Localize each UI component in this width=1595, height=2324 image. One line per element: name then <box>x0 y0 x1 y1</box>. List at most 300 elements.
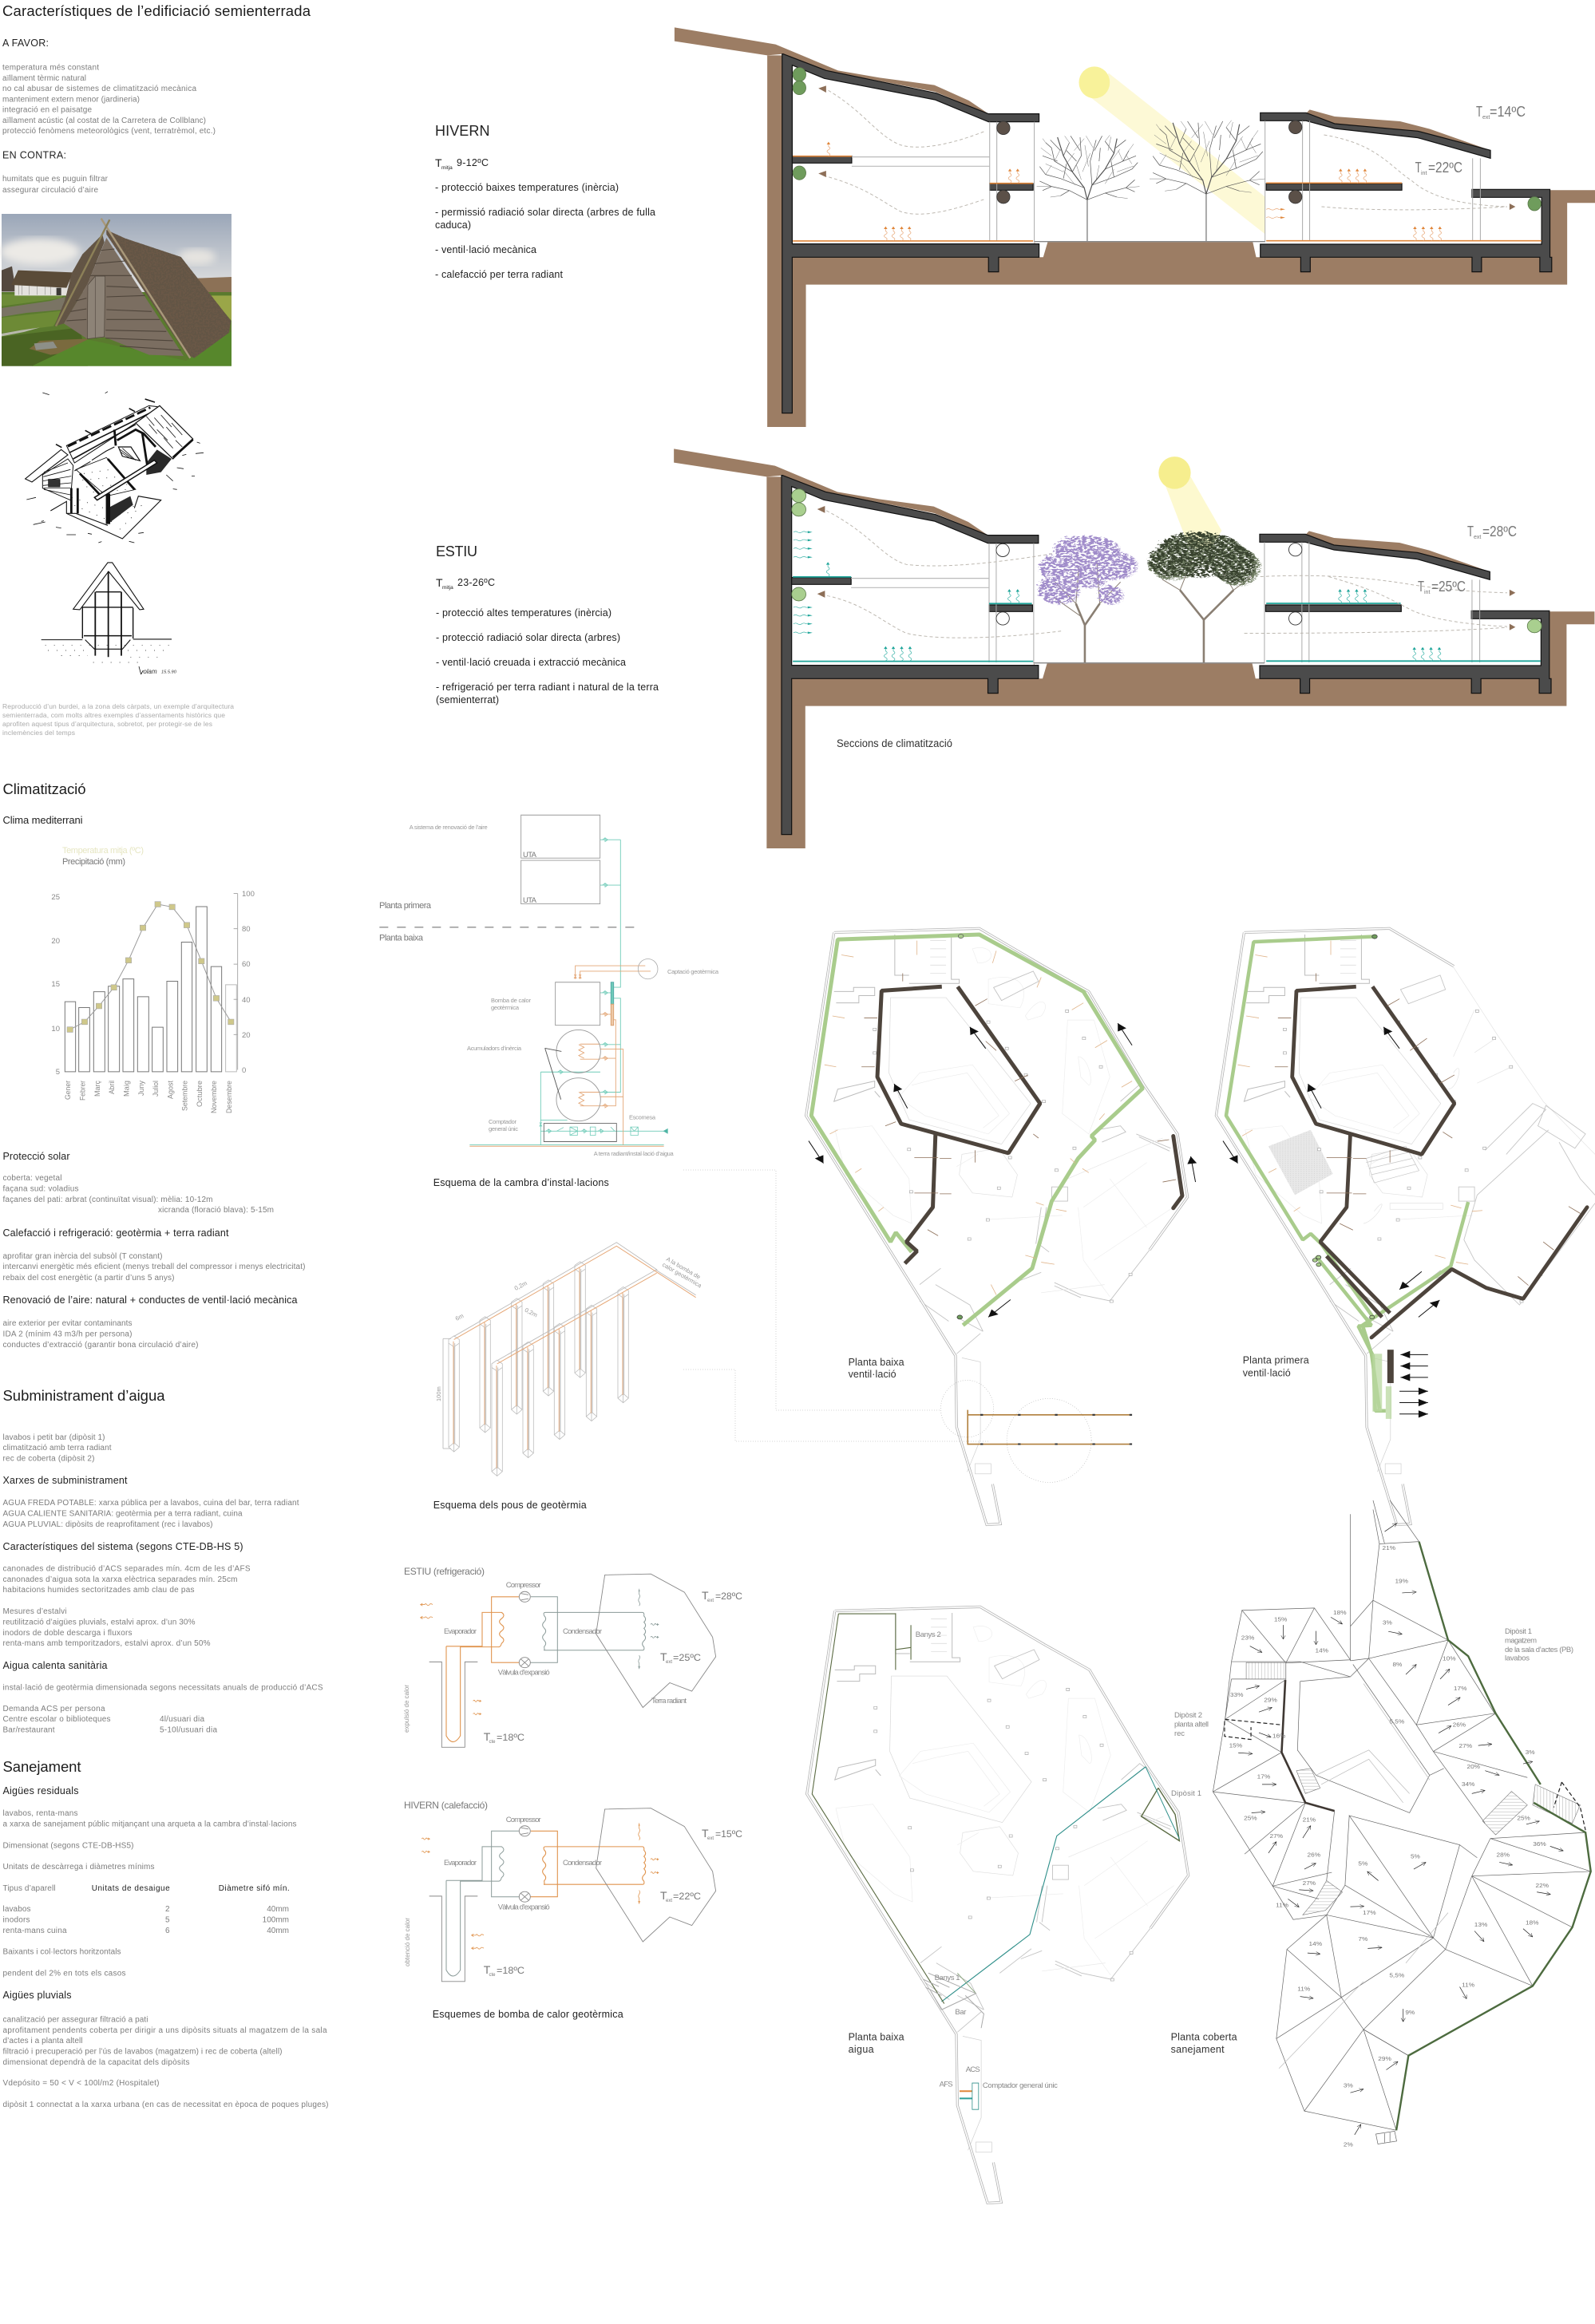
left axis: 20 <box>51 937 60 946</box>
text block: subministrament d'aigua: Característiques del sistema (segons CTE-DB-HS 5) <box>3 1541 243 1552</box>
circuit <box>422 1808 716 1982</box>
photo: semi-buried thatched hut <box>0 214 232 366</box>
text block: calefacció i refrigeració: rebaix del cost energètic (a partir d’uns 5 anys) <box>3 1274 174 1283</box>
table: drains: 5 <box>165 1915 170 1925</box>
plan caption <box>849 2032 904 2055</box>
sun and beam <box>1158 457 1221 550</box>
labels: T <box>660 1650 667 1663</box>
labels: HIVERN (calefacció) <box>404 1800 488 1811</box>
slope percentages: 22% <box>1536 1883 1549 1889</box>
slope percentages: 16% <box>1272 1733 1286 1739</box>
text block: sanejament: Sanejament <box>3 1758 81 1775</box>
labels: Planta primera <box>379 901 432 911</box>
slope percentages: 10% <box>1443 1655 1456 1662</box>
text block: calefacció i refrigeració <box>3 1227 305 1283</box>
table: drains: 6 <box>165 1927 170 1935</box>
text block: subministrament d'aigua: renta-mans amb temporitzadors, estalvi aprox. d’un 50% <box>3 1639 211 1648</box>
dimension labels: A la bomba de <box>665 1255 702 1281</box>
temperature labels: =14ºC <box>1490 104 1526 120</box>
sketch: cross section of the burdei <box>42 563 177 675</box>
text block: calefacció i refrigeració: Calefacció i refrigeració: geotèrmia + terra radiant <box>3 1227 229 1239</box>
supply air ducts <box>1226 937 1468 1411</box>
geothermal pipes <box>968 1410 1132 1445</box>
temperature labels: =28ºC <box>1482 524 1517 540</box>
text block: sanejament: d’actes i a planta altell <box>3 2037 83 2045</box>
month labels: Desembre <box>225 1081 234 1113</box>
plan caption: Planta baixa <box>849 1357 904 1368</box>
labels: ESTIU (refrigeració) <box>404 1566 485 1577</box>
floor plan drawing <box>1216 928 1595 1524</box>
table: drains: 40mm <box>267 1927 289 1935</box>
labels: =18ºC <box>497 1965 524 1976</box>
supply air duct <box>811 935 1142 1326</box>
slope percentages: 29% <box>1264 1697 1277 1703</box>
text block: protecció solar <box>3 1151 274 1215</box>
slope percentages: 17% <box>1363 1909 1376 1916</box>
dimension labels: 6m <box>454 1312 465 1322</box>
caption: inclemències del temps <box>2 729 75 737</box>
caption: semienterrada, com molts altres exemples d’assentaments històrics que <box>2 711 225 719</box>
table: drains: 40mm <box>267 1905 289 1914</box>
sketch: axonometric of the burdei <box>26 392 204 543</box>
labels: A sistema de renovació de l’aire <box>410 824 488 831</box>
caption <box>2 702 234 737</box>
text block: a favor: manteniment extern menor (jardineria) <box>2 95 140 104</box>
plot <box>65 893 238 1072</box>
right axis: 40 <box>242 996 251 1005</box>
text block: subministrament d'aigua: Xarxes de subministrament <box>3 1475 128 1486</box>
month labels: Gener <box>64 1081 73 1100</box>
slope percentages: 27% <box>1270 1833 1283 1840</box>
left axis: 5 <box>56 1068 60 1077</box>
slope percentages: 15% <box>1274 1616 1288 1622</box>
dimension labels: calor geotèrmica <box>661 1261 703 1290</box>
sun and beam <box>1079 66 1265 234</box>
plan labels: Banys 1 <box>935 1974 960 1982</box>
right axis: 0 <box>242 1066 246 1075</box>
slope percentages: 21% <box>1383 1545 1395 1551</box>
text block: en contra: humitats que es puguin filtrar <box>2 175 109 184</box>
table: drains: Diàmetre sifó mín. <box>219 1884 290 1893</box>
labels: obtenció de calor <box>403 1918 411 1966</box>
panel: hivern text <box>435 123 655 280</box>
diagram: heat pump summer <box>402 1566 742 1747</box>
slope percentages: 17% <box>1257 1773 1270 1780</box>
temperature labels: T <box>1476 104 1482 120</box>
panel: estiu text: - protecció altes temperatures (inèrcia) <box>436 607 611 619</box>
panel: hivern text: caduca) <box>435 219 471 231</box>
slope percentages: 5,5% <box>1389 1972 1404 1978</box>
diagram: geothermal wells <box>435 1243 703 1476</box>
slope percentages: 23% <box>1241 1634 1254 1641</box>
panel: hivern text: HIVERN <box>435 123 490 139</box>
labels: T <box>660 1889 667 1902</box>
plan caption: Planta coberta <box>1171 2032 1237 2043</box>
labels: Evaporador <box>444 1859 477 1868</box>
slope percentages: 25% <box>1244 1815 1257 1822</box>
text block: subministrament d'aigua: canonades de distribució d’ACS separades mín. 4cm de les d’AFS <box>3 1564 251 1574</box>
temperature labels: ext <box>1482 115 1490 121</box>
month labels: Octubre <box>196 1081 204 1107</box>
left axis: 10 <box>51 1025 60 1034</box>
sketch: cross section of the burdei: 15.5.90 <box>161 670 177 674</box>
text block: subministrament d'aigua: AGUA CALIENTE SANITARIA: geotèrmia per a terra radiant, cuina <box>3 1510 243 1518</box>
text block: sanejament: Aigües residuals <box>3 1785 78 1796</box>
plan: first floor ventilation <box>1216 928 1595 1524</box>
plan labels: Comptador general únic <box>983 2081 1058 2090</box>
panel: estiu text: ESTIU <box>436 543 477 559</box>
slope percentages: 33% <box>1230 1692 1244 1698</box>
text block: subministrament d'aigua: instal·lació de geotèrmia dimensionada segons necessitats anuals de producció d’ACS <box>3 1684 323 1692</box>
labels <box>379 824 719 1157</box>
panel: hivern text: - calefacció per terra radiant <box>435 269 564 280</box>
labels: Terra radiant <box>651 1697 687 1705</box>
text block: sanejament: pendent del 2% en tots els casos <box>3 1970 126 1978</box>
table: drains: Unitats de desaigue <box>92 1884 170 1893</box>
temperature labels: =25ºC <box>1431 579 1466 595</box>
caption: aprofiten aquest tipus d’arquitectura, sobretot, per protegir-se de les <box>2 720 212 728</box>
text block: sanejament: canalització per assegurar filtració a pati <box>3 2016 148 2024</box>
labels: =15ºC <box>715 1828 742 1840</box>
labels: ext <box>707 1836 714 1841</box>
text block: renovació de l'aire: aire exterior per evitar contaminants <box>3 1319 133 1328</box>
panel: estiu text: - refrigeració per terra radiant i natural de la terra <box>436 682 659 693</box>
labels: Condensador <box>563 1627 602 1636</box>
text block: subministrament d'aigua: lavabos i petit bar (dipòsit 1) <box>3 1433 105 1442</box>
text block: subministrament d'aigua: habitacions humides sectoritzades amb clau de pas <box>3 1586 195 1595</box>
building shell <box>675 27 1595 427</box>
text block: subministrament d'aigua: Demanda ACS per persona <box>3 1705 105 1713</box>
panel: hivern text: 9-12ºC <box>457 157 489 168</box>
labels: ext <box>707 1599 714 1603</box>
plan caption: sanejament <box>1171 2044 1225 2055</box>
text block: subministrament d'aigua: canonades d’aigua sota la xarxa elèctrica separades mín. 25cm <box>3 1575 238 1584</box>
slope percentages: 8% <box>1392 1661 1403 1668</box>
slope percentages: 20% <box>1466 1763 1480 1770</box>
labels: T <box>484 1963 491 1976</box>
plan labels <box>916 1630 1201 2090</box>
panel: hivern text: - protecció baixes temperatures (inèrcia) <box>435 182 619 193</box>
left axis <box>51 893 60 1077</box>
title: Característiques de l’edificiació semienterrada <box>2 2 311 19</box>
legend: Precipitació (mm) <box>62 857 125 867</box>
chart: climate <box>51 846 255 1113</box>
tank labels: Dipòsit 1 <box>1505 1627 1532 1636</box>
text block: renovació de l'aire: Renovació de l’aire: natural + conductes de ventil·lació mecànica <box>3 1294 298 1306</box>
caption: Reproducció d’un burdei, a la zona dels càrpats, un exemple d’arquitectura <box>2 702 234 710</box>
summer climate overlays <box>792 489 1542 662</box>
slope percentages: 26% <box>1453 1721 1466 1728</box>
month labels: Maig <box>123 1081 131 1097</box>
labels: Captació geotèrmica <box>667 968 719 975</box>
plan: ground floor ventilation <box>806 928 1196 1524</box>
panel: estiu text: T <box>436 576 443 589</box>
diffuser arrows <box>1238 941 1580 1286</box>
text block: sanejament <box>3 1758 329 2109</box>
slope percentages: 3% <box>1383 1619 1392 1626</box>
slope percentages <box>1229 1545 1549 2148</box>
labels: =25ºC <box>673 1652 701 1663</box>
extract air duct <box>877 986 1182 1263</box>
dimension labels <box>435 1255 703 1401</box>
right axis: 60 <box>242 960 251 969</box>
slope percentages: 5% <box>1358 1860 1367 1867</box>
text block: a favor: no cal abusar de sistemes de climatització mecànica <box>2 85 196 93</box>
text block: a favor: aïllament tèrmic natural <box>2 74 86 83</box>
slope percentages: 27% <box>1459 1742 1472 1749</box>
panel: hivern text: - permissió radiació solar directa (arbres de fulla <box>435 207 655 218</box>
table: drains: 100mm <box>263 1915 289 1925</box>
plan caption: aigua <box>849 2044 874 2055</box>
panel: hivern text: mitja <box>441 165 453 171</box>
slope percentages: 26% <box>1308 1852 1320 1858</box>
slope percentages: 15% <box>1229 1742 1242 1749</box>
right axis: 20 <box>242 1031 251 1040</box>
text block: sanejament: dipòsit 1 connectat a la xarxa urbana (en cas de necessitat en època de poques pluges) <box>3 2101 329 2109</box>
text block: subministrament d'aigua: 5-10l/usuari dia <box>160 1725 217 1735</box>
tank labels <box>1174 1627 1573 1738</box>
right axis <box>242 890 255 1075</box>
text block: sanejament: Dimensionat (segons CTE-DB-HS5) <box>3 1842 134 1850</box>
slope percentages: 14% <box>1309 1940 1322 1947</box>
plan caption <box>849 1357 904 1380</box>
temperature labels: int <box>1424 590 1430 595</box>
labels: =28ºC <box>715 1591 742 1602</box>
temperature labels: =22ºC <box>1428 160 1462 176</box>
labels: Evaporador <box>444 1627 477 1636</box>
slope percentages: 13% <box>1474 1921 1487 1928</box>
text block: subministrament d'aigua: AGUA FREDA POTABLE: xarxa pública per a lavabos, cuina del bar, terra radiant <box>3 1499 299 1508</box>
text block: a favor: aïllament acústic (al costat de la Carretera de Collblanc) <box>2 117 206 125</box>
wells <box>443 1243 696 1476</box>
diagram: installation room scheme <box>379 815 719 1157</box>
text block: renovació de l'aire: conductes d’extracció (garantir bona circulació d’aire) <box>3 1341 198 1350</box>
tree: jacaranda <box>1039 536 1138 662</box>
labels: Vàlvula d’expansió <box>498 1903 550 1911</box>
left axis: 15 <box>51 980 60 989</box>
dimension labels: 0,2m <box>524 1306 539 1318</box>
labels: A terra radiant/instal·lació d’aigua <box>594 1150 675 1157</box>
slope percentages: 17% <box>1454 1686 1467 1692</box>
tank labels: Dipòsit 2 <box>1174 1711 1202 1720</box>
text block: subministrament d'aigua: inodors de doble descarga i fluxors <box>3 1629 133 1638</box>
section caption: Seccions de climatització <box>837 737 952 749</box>
legend <box>62 846 144 867</box>
text block: sanejament: a xarxa de sanejament públic mitjançant una arqueta a la cambra d’instal·lacions <box>3 1820 297 1829</box>
flow arrows <box>809 1023 1196 1317</box>
slope percentages: 9% <box>1405 2010 1415 2016</box>
text block: a favor: A FAVOR: <box>2 38 49 49</box>
left axis: 25 <box>51 893 60 902</box>
plan labels: Bar <box>955 2008 966 2017</box>
text block: en contra <box>2 150 109 195</box>
labels: expulsió de calor <box>402 1685 410 1733</box>
text block: en contra: EN CONTRA: <box>2 150 66 161</box>
slope arrows <box>1238 1524 1563 2135</box>
slope percentages: 18% <box>1526 1919 1539 1926</box>
panel: estiu text: (semienterrat) <box>436 694 499 706</box>
heading: climatització <box>3 781 86 826</box>
table: drains: lavabos <box>3 1905 30 1914</box>
floor plan drawing <box>807 1607 1189 2203</box>
building shell <box>674 449 1594 848</box>
plan caption: ventil·lació <box>849 1369 896 1380</box>
plan: ground floor water <box>807 1607 1201 2203</box>
month labels: Març <box>93 1081 102 1097</box>
text block: subministrament d'aigua: Bar/restaurant <box>3 1725 55 1735</box>
labels: geotèrmica <box>491 1004 520 1011</box>
panel: hivern text: T <box>435 156 442 169</box>
slope percentages: 5,5% <box>1389 1718 1404 1725</box>
text block: a favor: protecció fenòmens meteorològics (vent, terratrèmol, etc.) <box>2 127 216 136</box>
temperature labels: int <box>1421 171 1427 176</box>
text block: a favor: temperatura més constant <box>2 64 99 72</box>
right axis: 100 <box>242 890 255 899</box>
text block: sanejament: aprofitament pendents coberta per dirigir a uns dipòsits situats al magatzem de la sala <box>3 2026 327 2035</box>
labels: UTA <box>523 851 537 860</box>
text block: subministrament d'aigua <box>3 1387 323 1735</box>
text block: subministrament d'aigua: reutilització d’aigües pluvials, estalvi aprox. d’un 30% <box>3 1618 196 1626</box>
slope percentages: 28% <box>1497 1852 1510 1858</box>
gutters <box>1396 1542 1591 2130</box>
tank labels: lavabos <box>1505 1654 1530 1663</box>
plan caption: Planta primera <box>1243 1355 1309 1366</box>
text block: en contra: assegurar circulació d’aire <box>2 186 98 195</box>
slope percentages: 7% <box>1358 1936 1367 1943</box>
winter climate overlays <box>793 68 1542 241</box>
slope percentages: 27% <box>1303 1880 1316 1887</box>
labels: cte <box>489 1973 496 1978</box>
heading: climatització: Clima mediterrani <box>3 814 83 826</box>
panel: estiu text <box>436 543 659 706</box>
table: drains: 2 <box>165 1905 170 1914</box>
labels: Vàlvula d’expansió <box>498 1668 550 1678</box>
labels: Planta baixa <box>379 934 424 943</box>
text block: a favor <box>2 38 216 136</box>
slope percentages: 2% <box>1344 2141 1353 2148</box>
text block: subministrament d'aigua: Centre escolar o biblioteques <box>3 1715 110 1724</box>
slope percentages: 5% <box>1411 1853 1420 1860</box>
text block: subministrament d'aigua: AGUA PLUVIAL: dipòsits de reaprofitament (rec i lavabos) <box>3 1520 212 1529</box>
text block: protecció solar: façana sud: voladius <box>3 1184 78 1194</box>
text block: renovació de l'aire <box>3 1294 298 1350</box>
text block: subministrament d'aigua: climatització amb terra radiant <box>3 1444 112 1452</box>
labels <box>403 1800 742 1978</box>
text block: protecció solar: façanes del pati: arbrat (continuïtat visual): mèlia: 10-12m <box>3 1196 212 1204</box>
labels: Bomba de calor <box>491 997 532 1004</box>
text block: sanejament: filtració i precuperació per l’ús de lavabos (magatzem) i rec de coberta (altell) <box>3 2048 283 2056</box>
labels: Acumuladors d’inèrcia <box>467 1045 522 1052</box>
text block: sanejament: Baixants i col·lectors horitzontals <box>3 1947 121 1957</box>
tree: melia <box>1150 532 1261 662</box>
labels: Compressor <box>506 1816 541 1824</box>
table: drains: inodors <box>3 1915 30 1925</box>
panel: estiu text: - ventil·lació creuada i extracció mecànica <box>436 657 626 668</box>
text block: protecció solar: xicranda (floració blava): 5-15m <box>158 1206 274 1215</box>
text block: a favor: integració en el paisatge <box>2 106 92 115</box>
labels: Comptador <box>489 1118 517 1125</box>
table: drains: renta-mans cuina <box>3 1927 67 1935</box>
labels: cte <box>489 1740 496 1745</box>
text block: subministrament d'aigua: Mesures d’estalvi <box>3 1607 67 1616</box>
plan labels: Banys 2 <box>916 1630 941 1639</box>
text block: calefacció i refrigeració: aprofitar gran inèrcia del subsòl (T constant) <box>3 1252 163 1261</box>
text block: sanejament: lavabos, renta-mans <box>3 1809 78 1818</box>
legend: Temperatura mitja (ºC) <box>62 846 144 856</box>
plan labels: ACS <box>966 2065 980 2074</box>
tank labels: planta altell <box>1174 1721 1209 1729</box>
slope percentages: 11% <box>1297 1986 1310 1993</box>
section: winter <box>675 27 1595 427</box>
circuit <box>421 1574 716 1747</box>
text block: protecció solar: Protecció solar <box>3 1151 70 1162</box>
dimension labels: 0,2m <box>513 1279 528 1292</box>
heading: climatització: Climatització <box>3 781 86 797</box>
tank labels: rec <box>1174 1729 1185 1738</box>
labels: ext <box>666 1899 672 1903</box>
heading: geothermal wells: Esquema dels pous de geotèrmia <box>433 1500 587 1511</box>
plan: roof drainage <box>1171 1500 1591 2148</box>
labels: Condensador <box>563 1859 602 1868</box>
dimension labels: 100m <box>435 1386 442 1401</box>
text block: subministrament d'aigua: Aigua calenta sanitària <box>3 1660 108 1671</box>
labels: Escomesa <box>629 1114 656 1120</box>
panel: estiu text: 23-26ºC <box>457 577 495 588</box>
labels: Compressor <box>506 1581 541 1590</box>
panel: hivern text: - ventil·lació mecànica <box>435 244 536 255</box>
labels: T <box>484 1730 491 1743</box>
labels: UTA <box>523 896 537 905</box>
month labels: Agost <box>166 1081 176 1099</box>
panel: estiu text: mitja <box>442 585 453 591</box>
labels: general únic <box>489 1125 518 1132</box>
panel: estiu text: - protecció radiació solar directa (arbres) <box>436 632 620 643</box>
plan caption <box>1171 2032 1237 2055</box>
month labels: Abril <box>108 1081 117 1094</box>
heading: installation room scheme: Esquema de la cambra d’instal·lacions <box>433 1177 609 1188</box>
heading: heat pump schemes: Esquemes de bomba de calor geotèrmica <box>433 2009 623 2020</box>
table: drains <box>3 1884 290 1935</box>
temperature labels: ext <box>1474 535 1481 540</box>
labels <box>402 1566 742 1745</box>
text block: protecció solar: coberta: vegetal <box>3 1174 62 1183</box>
flow arrows <box>1223 1027 1439 1414</box>
month labels: Juny <box>137 1081 146 1096</box>
roof triangulation <box>1213 1500 1591 2148</box>
month labels <box>64 1081 234 1113</box>
month labels: Juliol <box>152 1081 160 1097</box>
labels: ext <box>666 1660 672 1665</box>
slope percentages: 25% <box>1517 1815 1530 1822</box>
temperature labels: T <box>1415 160 1422 176</box>
tank labels: de la sala d’actes (PB) <box>1505 1646 1573 1654</box>
labels: =18ºC <box>497 1732 524 1743</box>
slope percentages: 18% <box>1333 1609 1347 1616</box>
water network <box>812 1614 1179 2109</box>
text block: subministrament d'aigua: Subministrament d’aigua <box>3 1387 165 1404</box>
text block: calefacció i refrigeració: intercanvi energètic més eficient (menys treball del compressor i menys electricitat) <box>3 1263 305 1271</box>
month labels: Setembre <box>180 1081 190 1111</box>
text block: sanejament: Unitats de descàrrega i diàmetres mínims <box>3 1863 155 1871</box>
table: drains: Tipus d’aparell <box>3 1884 56 1893</box>
temperature labels: T <box>1418 579 1424 595</box>
sketch: cross section of the burdei: olam <box>143 668 157 675</box>
text block: sanejament: Vdepósito = 50 < V < 100l/m2 (Hospitalet) <box>3 2079 160 2088</box>
section: summer <box>674 449 1594 848</box>
slope percentages: 3% <box>1344 2082 1353 2089</box>
plan labels: AFS <box>940 2080 953 2089</box>
slope percentages: 3% <box>1526 1749 1535 1756</box>
